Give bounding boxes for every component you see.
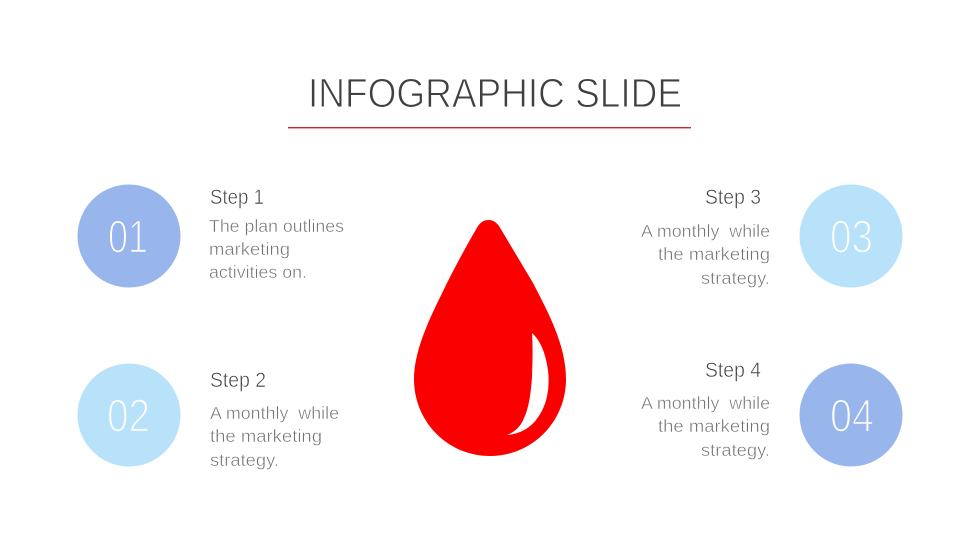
badge 02	[78, 364, 180, 466]
step 2 text: A monthly while	[210, 403, 339, 423]
badge 04	[800, 364, 902, 466]
step 4	[641, 359, 902, 466]
icon: blood drop	[414, 220, 566, 456]
step 2 text	[210, 369, 339, 470]
badge 04: 04	[830, 390, 874, 442]
step 1 text: activities on.	[209, 262, 307, 282]
step 2 text: the marketing	[210, 426, 322, 446]
step 4 text: Step 4	[705, 359, 761, 382]
step 3 text	[641, 186, 770, 288]
step 2 text: Step 2	[210, 369, 266, 392]
step 3 text: strategy.	[701, 268, 770, 288]
step 3 text: A monthly while	[641, 221, 770, 241]
step 1 text: Step 1	[210, 186, 264, 209]
badge 02: 02	[107, 390, 150, 442]
step 3 text: Step 3	[705, 186, 761, 209]
badge 01	[78, 184, 180, 288]
step 4 text: strategy.	[701, 440, 770, 460]
badge 03	[800, 184, 902, 288]
step 1 text	[209, 186, 344, 282]
badge 03: 03	[830, 210, 873, 262]
step 3 text: the marketing	[658, 244, 770, 264]
step 1 text: The plan outlines	[209, 216, 344, 236]
step 3	[641, 184, 902, 288]
step 1 text: marketing	[209, 239, 290, 259]
step 4 text: A monthly while	[641, 393, 770, 413]
step 1	[78, 184, 344, 288]
step 2	[78, 364, 339, 470]
step 4 text: the marketing	[658, 416, 770, 436]
badge 01: 01	[108, 210, 148, 262]
step 2 text: strategy.	[210, 450, 279, 470]
title: INFOGRAPHIC SLIDE	[308, 70, 682, 116]
step 4 text	[641, 359, 770, 460]
